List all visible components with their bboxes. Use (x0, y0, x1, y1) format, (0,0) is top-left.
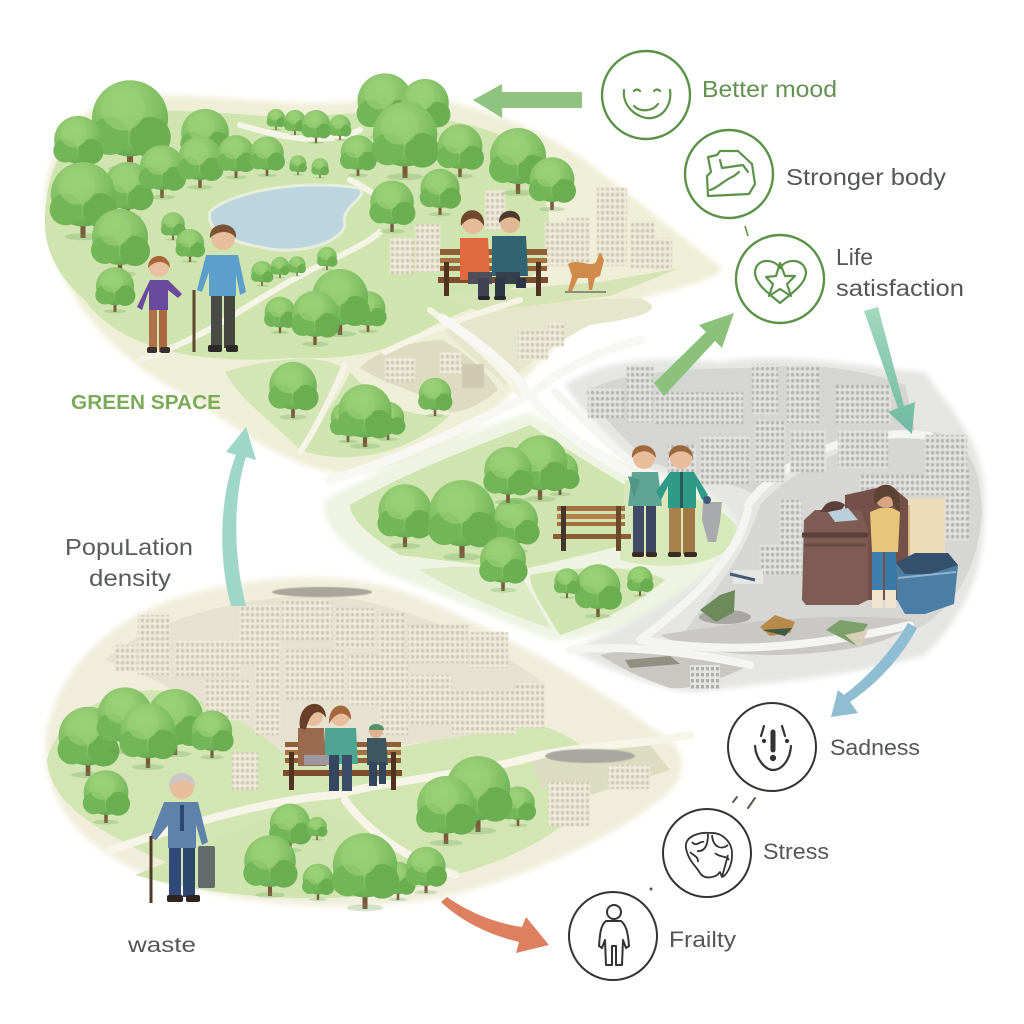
icon: sad face (755, 726, 791, 770)
white main roads (330, 318, 640, 480)
blue bin (896, 553, 958, 614)
person: woman near bins (870, 485, 900, 608)
park paths (140, 125, 520, 452)
person: elder man with suitcase (150, 773, 215, 903)
lake (209, 185, 361, 250)
arrow: to life satisfaction (654, 313, 734, 396)
trash bag (702, 496, 722, 542)
label: population density: PopuLation (65, 534, 193, 560)
label: population density: density (89, 565, 172, 591)
trees: central park (377, 435, 654, 619)
grey roads (555, 392, 930, 665)
buildings: top beige district (385, 188, 672, 388)
buildings: bottom beige city (115, 587, 650, 826)
callout: stronger body (685, 130, 947, 218)
callout: stress: Stress (763, 839, 829, 864)
callout: frailty: Frailty (669, 927, 736, 952)
bottom paths (110, 735, 690, 875)
icon: heart with star (755, 261, 806, 303)
trees: top park (50, 73, 576, 449)
person: man in teal jacket (628, 445, 662, 557)
label: waste: waste (127, 934, 196, 957)
bench with family (283, 704, 402, 791)
arrow: population density up to green space (222, 427, 256, 606)
connector tick (745, 226, 748, 236)
panel: central green pocket park (324, 412, 740, 640)
panel: green space park (45, 95, 722, 474)
callout: stress (663, 809, 829, 897)
callout: life satisfaction (736, 235, 964, 323)
person: elder man with cane (194, 224, 246, 352)
person: man in green cardigan (656, 445, 708, 557)
bench: central park (553, 506, 631, 551)
large brown bins (802, 485, 908, 605)
arrow: to sadness (831, 623, 917, 717)
callout: sadness (728, 703, 920, 791)
callout: better mood (602, 51, 837, 139)
icon: smile (624, 90, 670, 118)
person: child in purple (137, 256, 182, 353)
icon: person (599, 905, 629, 965)
callout: stronger body: Stronger body (786, 164, 947, 190)
arrow: down to urban district (864, 307, 915, 434)
heading: green space: GREEN SPACE (71, 391, 221, 414)
arrow: waste to frailty (441, 897, 549, 953)
icon: muscle (707, 151, 755, 196)
connector ticks (733, 797, 755, 808)
callout: sadness: Sadness (830, 735, 920, 760)
icon: brain (686, 833, 732, 877)
buildings: grey city blocks (588, 364, 969, 575)
callout: frailty (569, 892, 736, 980)
dog (565, 252, 606, 292)
callout: life satisfaction: satisfaction (836, 275, 964, 301)
litter piles (625, 570, 868, 689)
trees: bottom park (58, 687, 536, 911)
cardboard boxes (885, 498, 945, 560)
panel: bottom neighbourhood (45, 578, 690, 906)
callout: better mood: Better mood (702, 76, 837, 102)
arrow: toward better mood (473, 84, 582, 118)
bench with two people (438, 210, 548, 300)
connector dot (650, 888, 652, 890)
callout: life satisfaction: Life (836, 244, 873, 270)
panel: grey urban district (555, 358, 985, 692)
